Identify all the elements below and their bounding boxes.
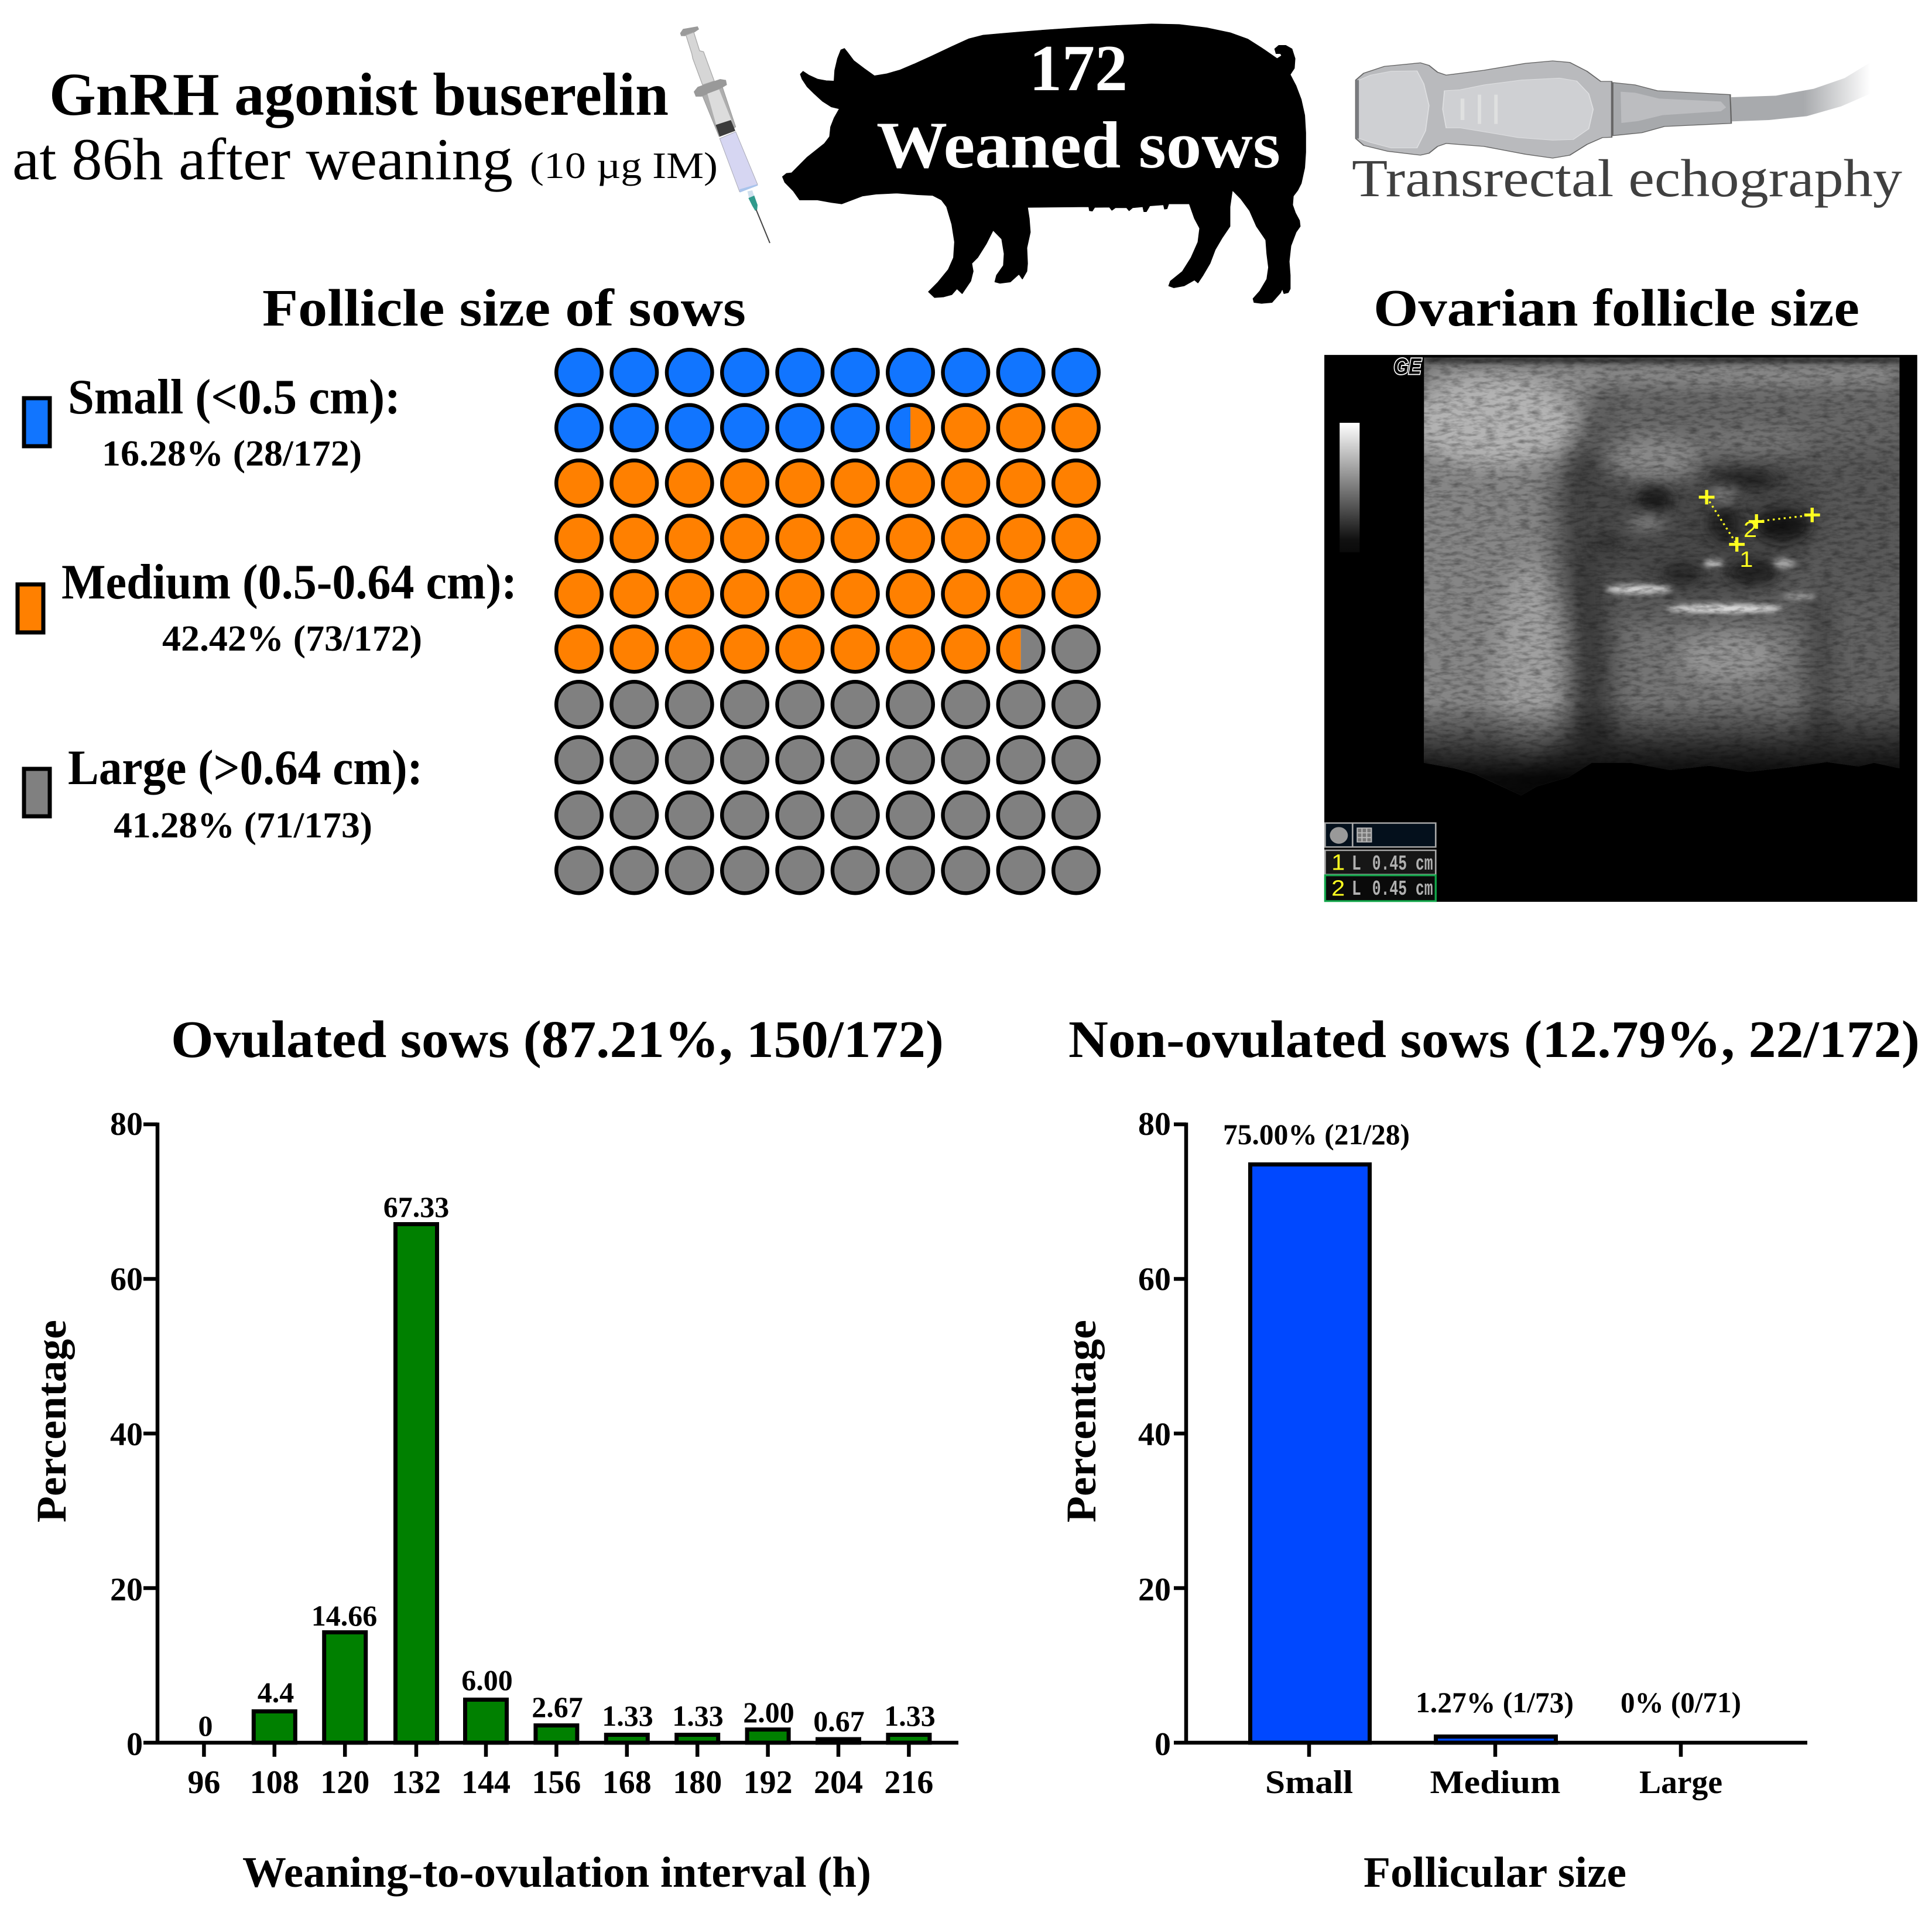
legend item: large: 41.28% (71/173)	[114, 806, 372, 846]
x-axis tick labels: 216	[884, 1764, 933, 1801]
heading: Ovarian follicle size: Ovarian follicle size	[1373, 279, 1859, 337]
heading: GnRH agonist buserelin	[12, 61, 718, 193]
heading: GnRH agonist buserelin: GnRH agonist buserelin	[49, 61, 669, 128]
bar value labels: 1.27% (1/73)	[1416, 1686, 1574, 1719]
heading: 172 Weaned sows	[876, 32, 1280, 182]
bar value labels: 75.00% (21/28)	[1223, 1118, 1410, 1151]
heading: 172 Weaned sows: 172	[1029, 32, 1128, 105]
text: Transrectal echography: Transrectal echography	[1352, 149, 1903, 208]
x-axis tick labels: 108	[250, 1764, 299, 1801]
x-axis tick labels: 120	[320, 1764, 369, 1801]
axes	[143, 1123, 958, 1757]
legend item: small: 16.28% (28/172)	[102, 434, 362, 474]
half circle: blue and orange	[888, 405, 933, 450]
heading: Follicle size of sows: Follicle size of sows	[262, 279, 746, 337]
y-axis title: Percentage	[28, 1320, 75, 1523]
bar value labels	[198, 1190, 936, 1742]
measurement readout panel: L	[1352, 853, 1361, 876]
x-axis title: Weaning-to-ovulation interval (h)	[242, 1849, 871, 1897]
legend item: medium: Medium (0.5-0.64 cm):	[61, 555, 517, 610]
bar value labels: 67.33	[383, 1190, 449, 1223]
x-axis tick labels: 96	[187, 1764, 220, 1801]
x-axis tick labels: 156	[532, 1764, 581, 1801]
legend item: medium: 42.42% (73/172)	[162, 619, 422, 659]
x-axis tick labels: 144	[461, 1764, 511, 1801]
legend item: large	[24, 740, 423, 846]
x-axis title: Follicular size	[1364, 1849, 1626, 1897]
legend item: large: Large (>0.64 cm):	[68, 740, 423, 795]
icon: pig silhouette	[782, 24, 1306, 303]
half circle: orange and grey	[998, 627, 1043, 672]
chart: ovulated sows bar chart	[28, 1106, 958, 1897]
panel: ultrasound image of ovarian follicle	[1324, 354, 1917, 902]
bar value labels: 1.33	[884, 1699, 936, 1732]
legend item: medium	[18, 555, 517, 659]
y-axis tick labels: 0	[1155, 1726, 1171, 1763]
chart: non-ovulated sows bar chart	[1058, 1106, 1807, 1897]
measurement readout panel	[1325, 823, 1436, 902]
GE logo: GE	[1394, 354, 1422, 379]
text: at 86h after weaning: (10 µg IM)	[530, 145, 718, 186]
bar value labels	[1223, 1118, 1741, 1719]
x-axis category labels	[1265, 1764, 1722, 1801]
axes	[1174, 1123, 1807, 1757]
text: at 86h after weaning: at 86h after weaning	[12, 126, 513, 193]
bars	[1251, 1164, 1556, 1743]
heading: Ovulated sows: Ovulated sows (87.21%, 150/172)	[171, 1011, 944, 1069]
y-axis tick labels: 60	[1138, 1261, 1171, 1298]
measurement readout panel: L	[1352, 878, 1361, 902]
x-axis category labels: Small	[1265, 1764, 1353, 1801]
x-axis tick labels: 168	[602, 1764, 652, 1801]
y-axis tick labels: 60	[110, 1261, 143, 1298]
legend item: small	[24, 370, 400, 474]
y-axis tick labels: 80	[110, 1106, 143, 1142]
bar value labels: 1.33	[672, 1699, 724, 1732]
bar value labels: 6.00	[461, 1664, 513, 1696]
bar value labels: 0% (0/71)	[1621, 1686, 1741, 1719]
bar value labels: 0.67	[813, 1705, 865, 1737]
x-axis tick labels: 132	[392, 1764, 441, 1801]
measurement readout panel: 2	[1331, 876, 1345, 901]
measurement calipers: 1	[1739, 547, 1753, 572]
bar value labels: 2.67	[532, 1691, 583, 1723]
x-axis tick labels: 192	[744, 1764, 793, 1801]
y-axis tick labels: 40	[110, 1417, 143, 1453]
legend item: small: Small (<0.5 cm):	[68, 370, 400, 425]
heading: Non-ovulated sows: Non-ovulated sows (12.79%, 22/172)	[1068, 1011, 1920, 1069]
measurement readout panel: 0.45 cm	[1372, 853, 1433, 876]
x-axis category labels: Large	[1639, 1764, 1722, 1801]
y-axis tick labels: 20	[1138, 1572, 1171, 1608]
legend: follicle size categories	[18, 370, 517, 846]
y-axis tick labels	[1138, 1106, 1171, 1763]
y-axis title: Percentage	[1058, 1320, 1105, 1523]
x-axis category labels: Medium	[1430, 1764, 1561, 1801]
y-axis tick labels: 0	[126, 1726, 143, 1763]
bar value labels: 14.66	[311, 1599, 377, 1632]
icon: syringe	[680, 26, 770, 243]
measurement readout panel: 0.45 cm	[1372, 878, 1433, 902]
measurement calipers	[1699, 490, 1820, 572]
text: at 86h after weaning	[12, 126, 718, 193]
y-axis tick labels: 80	[1138, 1106, 1171, 1142]
bar value labels: 0	[198, 1709, 213, 1742]
measurement calipers: 2	[1743, 518, 1757, 542]
bars	[254, 1224, 930, 1743]
chart: waffle grid of follicle size	[556, 350, 1099, 893]
bar value labels: 4.4	[258, 1676, 294, 1709]
heading: 172 Weaned sows: Weaned sows	[876, 109, 1280, 182]
bar value labels: 1.33	[602, 1699, 653, 1732]
x-axis tick labels: 180	[673, 1764, 722, 1801]
bar value labels: 2.00	[743, 1696, 794, 1729]
x-axis tick labels	[187, 1764, 933, 1801]
measurement readout panel: 1	[1331, 850, 1345, 875]
y-axis tick labels: 40	[1138, 1417, 1171, 1453]
y-axis tick labels: 20	[110, 1572, 143, 1608]
icon: ultrasound probe	[1356, 61, 1871, 158]
x-axis tick labels: 204	[814, 1764, 863, 1801]
grey scale bar	[1340, 423, 1359, 552]
y-axis tick labels	[110, 1106, 143, 1763]
